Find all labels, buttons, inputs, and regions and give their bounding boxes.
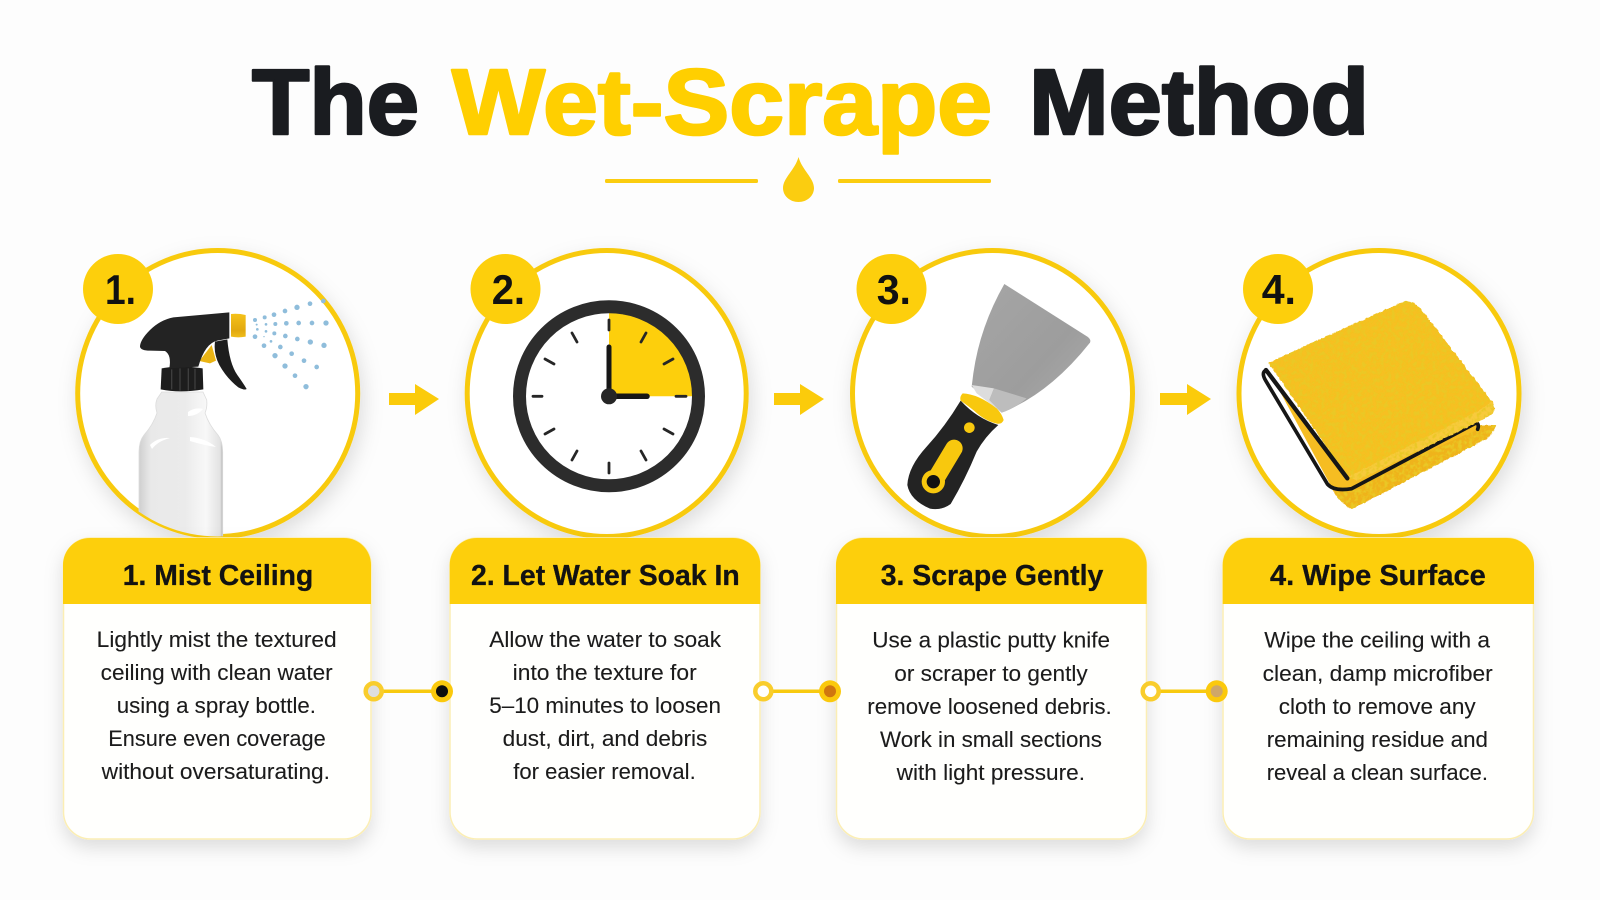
card 2 — [450, 538, 760, 839]
panel: step 1 mist ceiling — [63, 250, 371, 839]
icon: putty knife — [907, 284, 1090, 509]
card 4 body text: remaining residue and — [1267, 727, 1488, 752]
card 1 body text: ceiling with clean water — [101, 660, 333, 685]
card 2 body text: dust, dirt, and debris — [503, 726, 707, 751]
card 3 — [836, 538, 1147, 839]
icon circle 2 — [467, 250, 746, 536]
title: The — [252, 50, 419, 154]
card 2 header: 2. Let Water Soak In — [471, 560, 740, 592]
title: Method — [1029, 50, 1369, 154]
card 4 body text — [1263, 628, 1493, 785]
card 4 header — [1223, 538, 1534, 604]
card 3 body text: Work in small sections — [880, 727, 1102, 752]
card 4 body text: reveal a clean surface. — [1267, 760, 1488, 785]
icon circle 3 — [852, 250, 1132, 536]
number badge 2: 2. — [492, 266, 525, 313]
icon: microfiber towel — [1263, 301, 1496, 509]
card 2 body text: Allow the water to soak — [489, 627, 722, 652]
card 1 body text: Lightly mist the textured — [97, 627, 337, 652]
card 2 body text — [489, 627, 722, 784]
card 1 header — [63, 538, 371, 604]
arrow 3 to 4 — [1160, 384, 1211, 415]
panel: step 2 let water soak in — [450, 250, 760, 839]
title: Wet-Scrape — [452, 50, 992, 154]
connector 1 to 2 — [366, 680, 453, 702]
card 3 body text: or scraper to gently — [894, 661, 1088, 686]
number badge 4 — [1243, 254, 1313, 324]
card 3 header — [836, 538, 1147, 604]
connector 2 to 3 — [755, 680, 841, 702]
number badge 2 — [470, 254, 540, 324]
title — [252, 50, 1369, 154]
card 4 header: 4. Wipe Surface — [1270, 560, 1486, 592]
number badge 4: 4. — [1262, 266, 1296, 313]
card 2 body text: 5–10 minutes to loosen — [489, 693, 721, 718]
card 1 — [63, 538, 371, 839]
icon: spray bottle — [139, 299, 329, 540]
icon: clock — [520, 307, 698, 486]
number badge 1 — [83, 254, 153, 324]
icon circle 4 — [1239, 250, 1519, 536]
card 3 body text: Use a plastic putty knife — [872, 628, 1110, 652]
panel: step 4 wipe surface — [1223, 250, 1534, 839]
card 4 body text: Wipe the ceiling with a — [1264, 628, 1490, 652]
card 4 — [1223, 538, 1534, 839]
panel: step 3 scrape gently — [836, 250, 1147, 839]
card 1 body text: without oversaturating. — [101, 759, 330, 784]
card 1 body text — [97, 627, 337, 784]
number badge 1: 1. — [105, 266, 136, 313]
card 1 body text: Ensure even coverage — [108, 726, 326, 751]
arrow 2 to 3 — [774, 384, 824, 415]
card 3 body text: remove loosened debris. — [867, 694, 1112, 719]
card 2 body text: into the texture for — [513, 660, 697, 685]
title divider with water drop — [605, 157, 991, 202]
card 3 body text: with light pressure. — [896, 760, 1085, 785]
card 4 body text: clean, damp microfiber — [1263, 661, 1493, 686]
connector 3 to 4 — [1143, 680, 1228, 702]
card 1 body text: using a spray bottle. — [117, 693, 316, 718]
card 3 header: 3. Scrape Gently — [881, 560, 1103, 592]
icon circle 1 — [78, 250, 358, 536]
card 3 body text — [867, 628, 1112, 785]
card 1 header: 1. Mist Ceiling — [123, 560, 313, 592]
card 2 header — [450, 538, 760, 604]
card 2 body text: for easier removal. — [513, 759, 696, 784]
arrow 1 to 2 — [389, 384, 439, 415]
card 4 body text: cloth to remove any — [1279, 694, 1476, 719]
number badge 3: 3. — [877, 266, 911, 313]
number badge 3 — [856, 254, 926, 324]
